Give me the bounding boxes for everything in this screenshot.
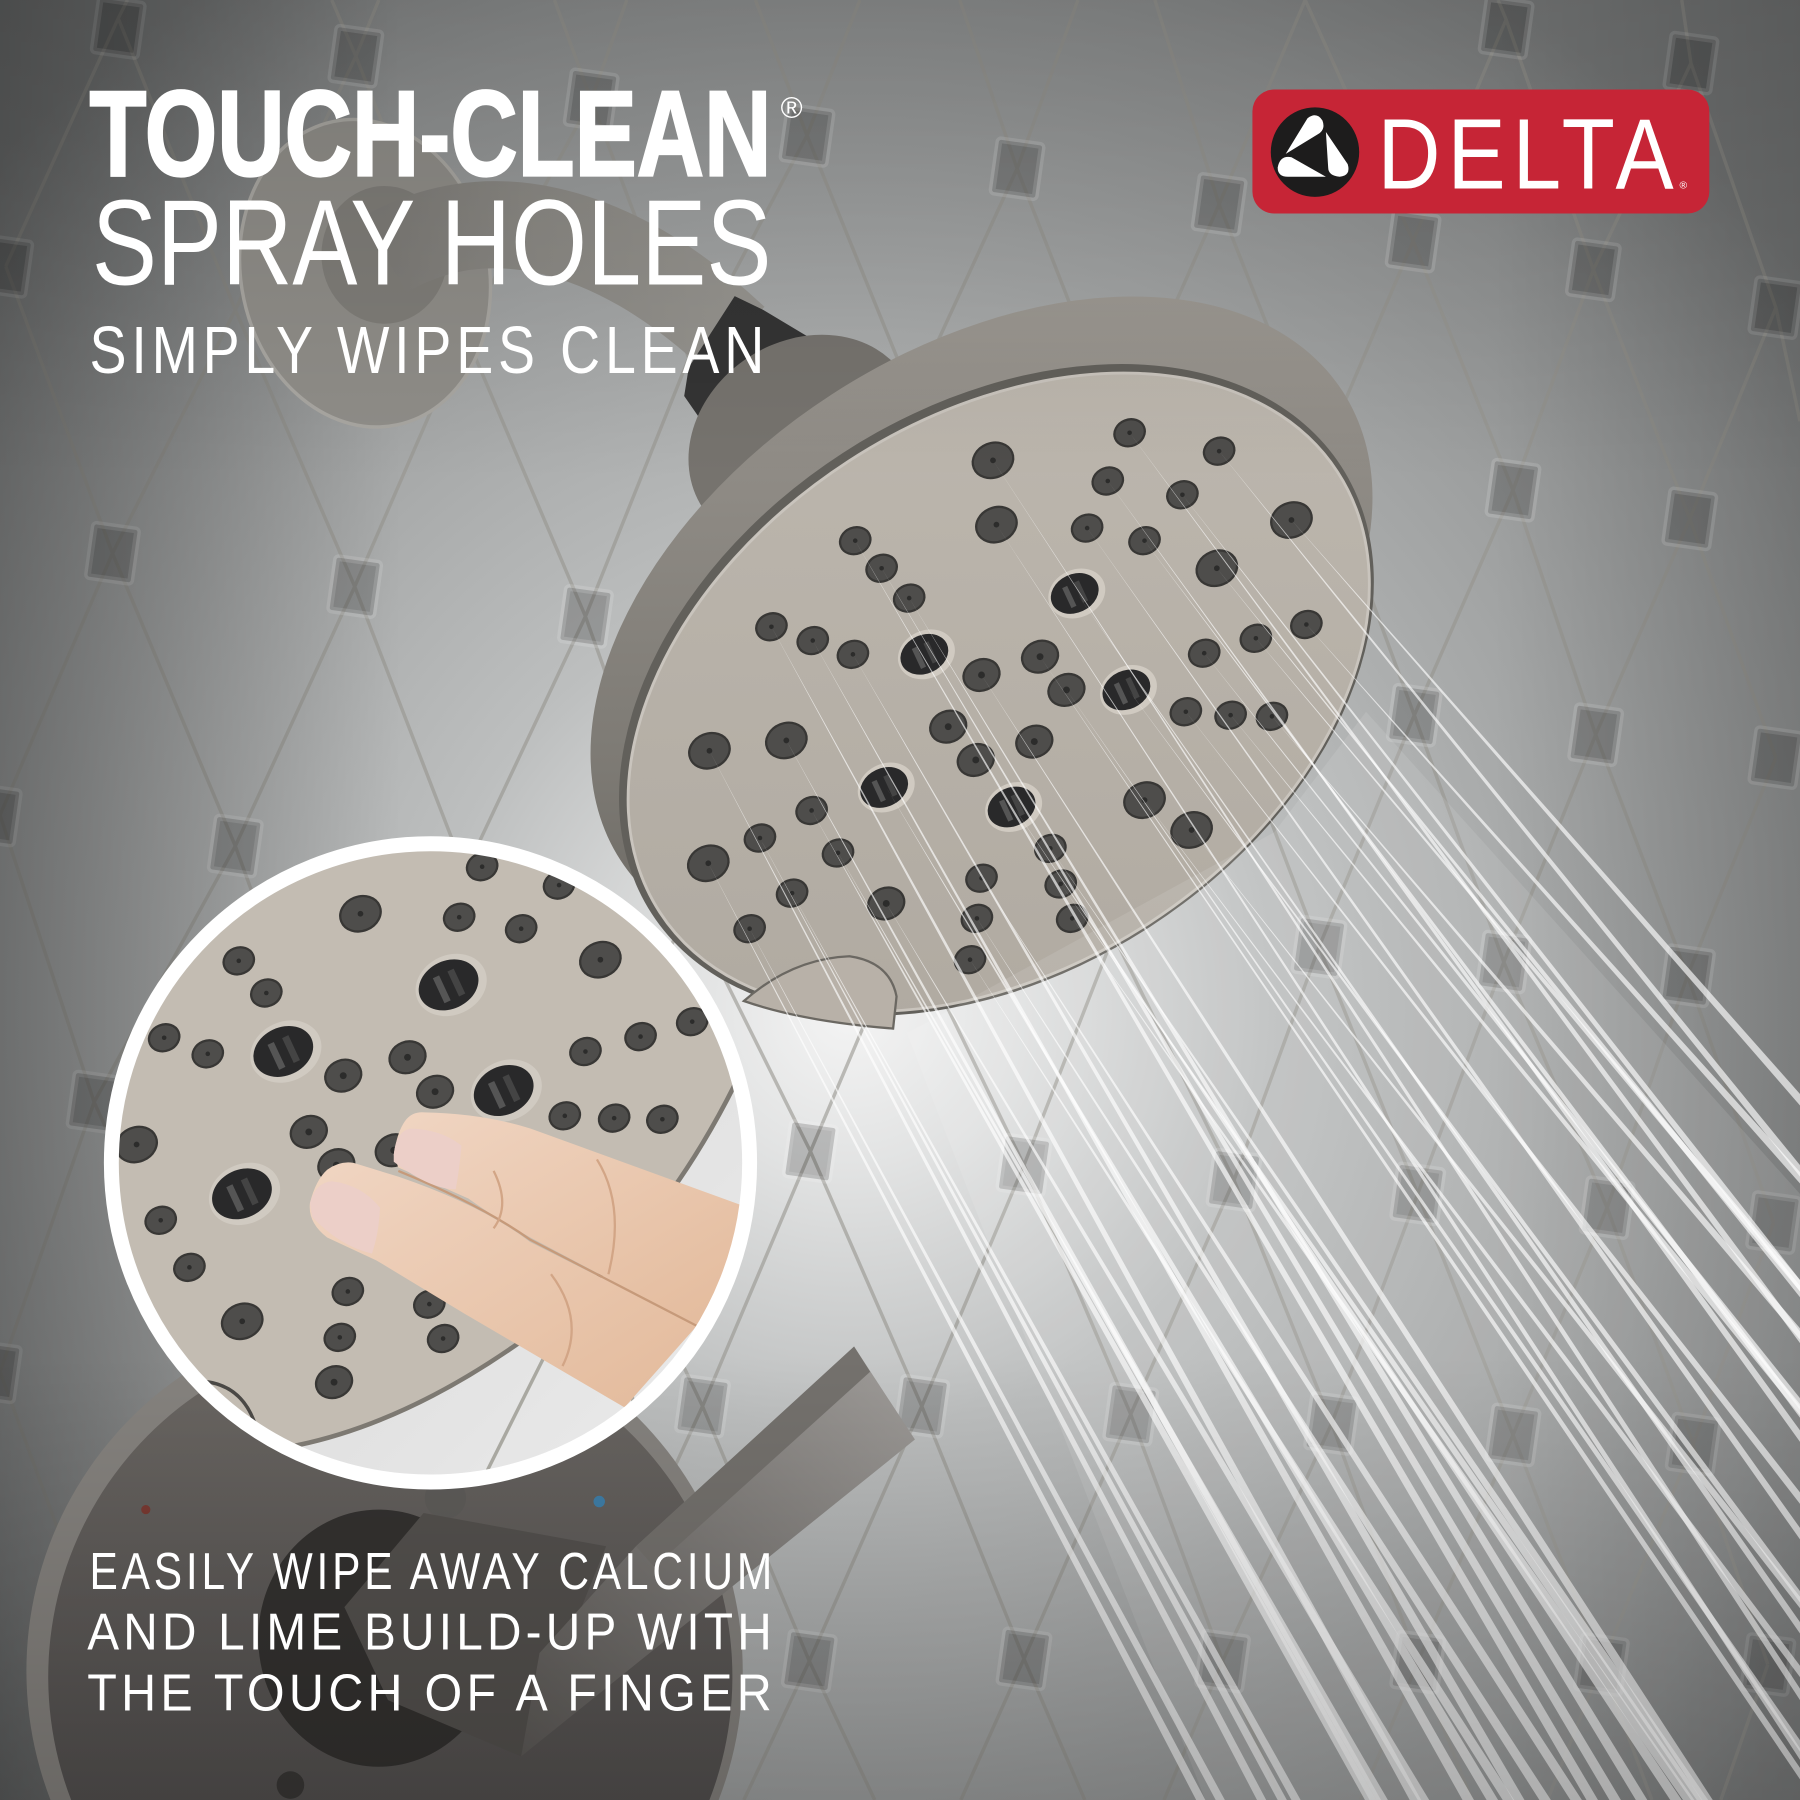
inset selector tab <box>207 1380 256 1422</box>
neck collar <box>647 292 960 592</box>
lower finger <box>310 1162 697 1407</box>
shower arm and wall flange <box>212 96 821 451</box>
headline: Spray Holes: SPRAY HOLES <box>92 175 771 311</box>
head body <box>470 160 1493 1091</box>
spray holes <box>683 415 1326 978</box>
lower fingernail <box>310 1181 380 1254</box>
water spray streams <box>708 433 1800 1800</box>
logo registered mark: ® <box>1679 180 1687 191</box>
caption line 2: AND LIME BUILD-UP WITH <box>87 1603 776 1661</box>
icon: cold indicator <box>593 1496 605 1507</box>
wordmark: DELTA <box>1378 99 1681 210</box>
inset circle: fingers wiping spray holes <box>92 804 769 1492</box>
shower head <box>470 160 1495 1151</box>
upper finger <box>394 1112 758 1326</box>
icon: Delta triangle mark <box>1271 107 1359 197</box>
inset face plate <box>118 851 734 1447</box>
caption line 3: THE TOUCH OF A FINGER <box>87 1663 776 1721</box>
headline: Touch-Clean: TOUCH-CLEAN <box>90 66 771 202</box>
caption <box>87 1542 776 1721</box>
registered mark: ® <box>781 92 803 125</box>
inset white ring <box>111 844 750 1482</box>
inset spray holes <box>111 849 712 1403</box>
logo: Delta <box>1252 90 1709 214</box>
head face plate <box>510 241 1488 1143</box>
caption line 1: EASILY WIPE AWAY CALCIUM <box>90 1542 776 1600</box>
upper fingernail <box>394 1128 461 1189</box>
icon: hot indicator <box>141 1505 150 1514</box>
subhead: SIMPLY WIPES CLEAN <box>90 314 769 388</box>
trim plate and lever handle <box>26 1313 915 1800</box>
heading block <box>90 66 803 388</box>
spray selector tab <box>744 956 897 1029</box>
